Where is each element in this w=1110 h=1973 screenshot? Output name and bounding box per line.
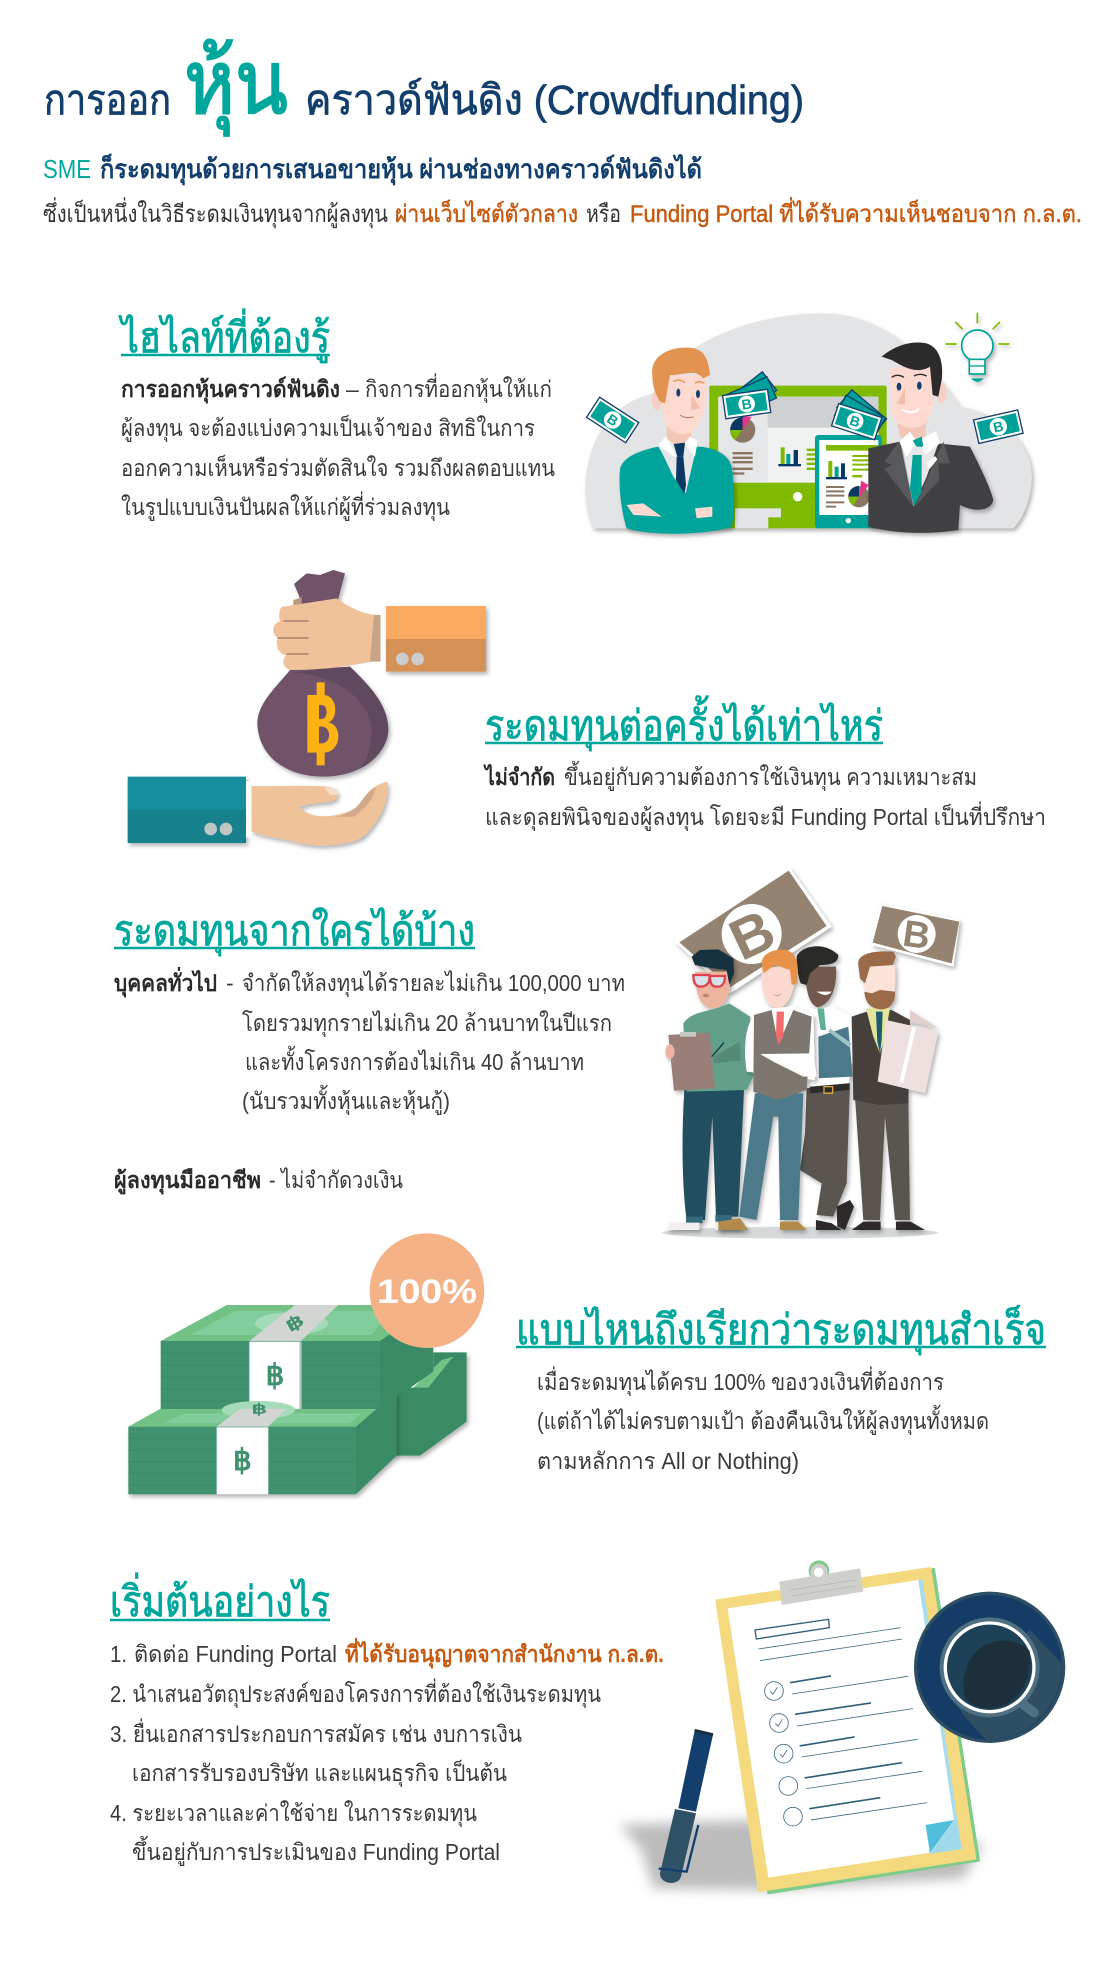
subtitle: SME (43, 154, 91, 184)
upper stack (161, 1305, 440, 1409)
panel: highlights text (118, 309, 555, 521)
checklist (755, 1619, 927, 1826)
text block: success: ตามหลักการ All or Nothing) (537, 1448, 799, 1474)
text block: general public: - (226, 970, 234, 996)
clip (779, 1560, 863, 1605)
subtitle: ซึ่งเป็นหนึ่งในวิธีระดมเงินทุนจากผู้ลงทุน (43, 197, 388, 229)
text block: how much (482, 761, 1046, 831)
text block: how much: ไม่จำกัด (482, 763, 555, 790)
title: การออก (44, 77, 171, 123)
text block: general public: โดยรวมทุกรายไม่เกิน 20 ล้านบาทในปีแรก (242, 1010, 612, 1037)
bill right: B (992, 418, 1005, 436)
text block: general public: บุคคลทั่วไป (114, 966, 217, 998)
subtitle: หรือ (586, 201, 621, 228)
text block: highlights: กิจการที่ออกหุ้นให้แก่ (365, 373, 552, 403)
text block: success: (แต่ถ้าได้ไม่ครบตามเป้า ต้องคืนเงินให้ผู้ลงทุนทั้งหมด (537, 1405, 989, 1435)
heading: success: แบบไหนถึงเรียกว่าระดมทุนสำเร็จ (516, 1305, 1046, 1356)
text block: how much: และดุลยพินิจของผู้ลงทุน โดยจะมี Funding Portal เป็นที่ปรึกษา (485, 801, 1046, 831)
bill: B (604, 411, 621, 429)
steps list: 3. ยื่นเอกสารประกอบการสมัคร เช่น งบการเงิน (110, 1718, 522, 1747)
text block: professional investors: ผู้ลงทุนมืออาชีพ (114, 1167, 261, 1195)
lower stack: ฿ (233, 1444, 252, 1477)
bills stack right: B (848, 412, 862, 430)
pen (659, 1729, 713, 1883)
text block: success (537, 1366, 989, 1474)
illustration: businessman right, lightbulb and money (832, 313, 1023, 533)
person 1 (665, 949, 753, 1230)
text block: general public (114, 966, 625, 1115)
steps list (110, 1637, 664, 1866)
person 4 (852, 951, 938, 1230)
cloud background (585, 313, 1032, 528)
tablet (815, 435, 882, 528)
subtitle: ก็ระดมทุนด้วยการเสนอขายหุ้น ผ่านช่องทางคราวด์ฟันดิงได้ (100, 153, 702, 186)
title: คราวด์ฟันดิง (Crowdfunding) (305, 77, 804, 123)
illustration: two businessmen with monitor and money (585, 313, 1032, 534)
text block: how much: ขึ้นอยู่กับความต้องการใช้เงินทุน ความเหมาะสม (564, 761, 977, 791)
steps list: เอกสารรับรองบริษัท และแผนธุรกิจ เป็นต้น (132, 1758, 507, 1787)
steps list: ที่ได้รับอนุญาตจากสำนักงาน ก.ล.ต. (345, 1637, 664, 1669)
heading: highlights: ไฮไลท์ที่ต้องรู้ (118, 309, 330, 363)
panel: who can invest (114, 907, 625, 1195)
heading: how much: ระดมทุนต่อครั้งได้เท่าไหร่ (485, 695, 883, 752)
cast shadow (620, 1820, 983, 1890)
person 3 (797, 946, 865, 1230)
illustration: hands passing money bag (128, 570, 486, 846)
text block: general public: (นับรวมทั้งหุ้นและหุ้นกู้) (242, 1085, 450, 1115)
badge: 100% (370, 1233, 484, 1348)
coffee cup (914, 1592, 1065, 1743)
steps list: 1. (110, 1641, 127, 1667)
upper hand (273, 597, 386, 670)
upper stack: ฿ (282, 1310, 307, 1335)
subtitle: ผ่านเว็บไซต์ตัวกลาง (395, 199, 578, 228)
bills stack (723, 372, 777, 419)
steps list: ขึ้นอยู่กับการประเมินของ Funding Portal (132, 1836, 500, 1866)
orange cuff (386, 606, 486, 672)
small sign: B (900, 912, 933, 957)
text block: professional investors: - ไม่จำกัดวงเงิน (269, 1167, 403, 1193)
back stack (393, 1352, 467, 1456)
heading: who: ระดมทุนจากใครได้บ้าง (114, 907, 475, 957)
money bag (257, 570, 388, 777)
steps list: 4. ระยะเวลาและค่าใช้จ่าย ในการระดมทุน (110, 1800, 477, 1827)
clipboard (717, 1568, 979, 1893)
text block: professional investors (114, 1167, 403, 1195)
person 2 (718, 950, 817, 1230)
panel: what counts as success (516, 1305, 1046, 1474)
steps list: 2. นำเสนอวัตถุประสงค์ของโครงการที่ต้องใช้เงินระดมทุน (110, 1678, 601, 1708)
illustration: group of investors with signs (662, 867, 960, 1239)
illustration: stacks of baht banknotes (128, 1233, 484, 1494)
bills stack right (832, 390, 887, 440)
big sign (675, 867, 832, 993)
small sign (872, 903, 960, 967)
heading: how to start: เริ่มต้นอย่างไร (110, 1573, 330, 1625)
text block: general public: และทั้งโครงการต้องไม่เกิน 40 ล้านบาท (245, 1046, 584, 1075)
teal cuff (128, 777, 246, 843)
text block: highlights: – (346, 376, 359, 402)
ground shadow (662, 1227, 938, 1239)
subtitle: Funding Portal ที่ได้รับความเห็นชอบจาก ก.ล.ต. (630, 197, 1082, 228)
subtitle (43, 153, 1082, 229)
bills stack: B (741, 395, 753, 413)
bill right (974, 410, 1023, 443)
text block: highlights: ในรูปแบบเงินปันผลให้แก่ผู้ที่ร่วมลงทุน (121, 491, 450, 521)
title: หุ้น (184, 33, 288, 136)
panel: how to start (110, 1573, 664, 1866)
text block: highlights (121, 373, 555, 521)
text block: highlights: ออกความเห็นหรือร่วมตัดสินใจ รวมถึงผลตอบแทน (121, 453, 555, 481)
text block: highlights: การออกหุ้นคราวด์ฟันดิง (121, 376, 340, 404)
lower hand (246, 782, 387, 846)
lower stack (128, 1392, 397, 1494)
big sign: B (720, 898, 785, 973)
steps list: ติดต่อ Funding Portal (134, 1641, 337, 1667)
monitor (709, 386, 887, 528)
text block: success: เมื่อระดมทุนได้ครบ 100% ของวงเงินที่ต้องการ (537, 1366, 944, 1396)
businessman right (868, 342, 993, 533)
title (44, 33, 804, 136)
illustration: clipboard, coffee and pen (620, 1560, 1065, 1893)
text block: general public: จำกัดให้ลงทุนได้รายละไม่เกิน 100,000 บาท (242, 970, 625, 997)
lower stack: ฿ (251, 1402, 267, 1417)
text block: highlights: ผู้ลงทุน จะต้องแบ่งความเป็นเจ้าของ สิทธิในการ (121, 413, 535, 442)
badge: 100%: 100% (377, 1273, 477, 1311)
bill (587, 397, 639, 443)
icon: lightbulb (945, 313, 1009, 382)
upper stack: ฿ (266, 1359, 284, 1392)
businessman left (620, 348, 734, 534)
panel: how much (482, 695, 1046, 831)
